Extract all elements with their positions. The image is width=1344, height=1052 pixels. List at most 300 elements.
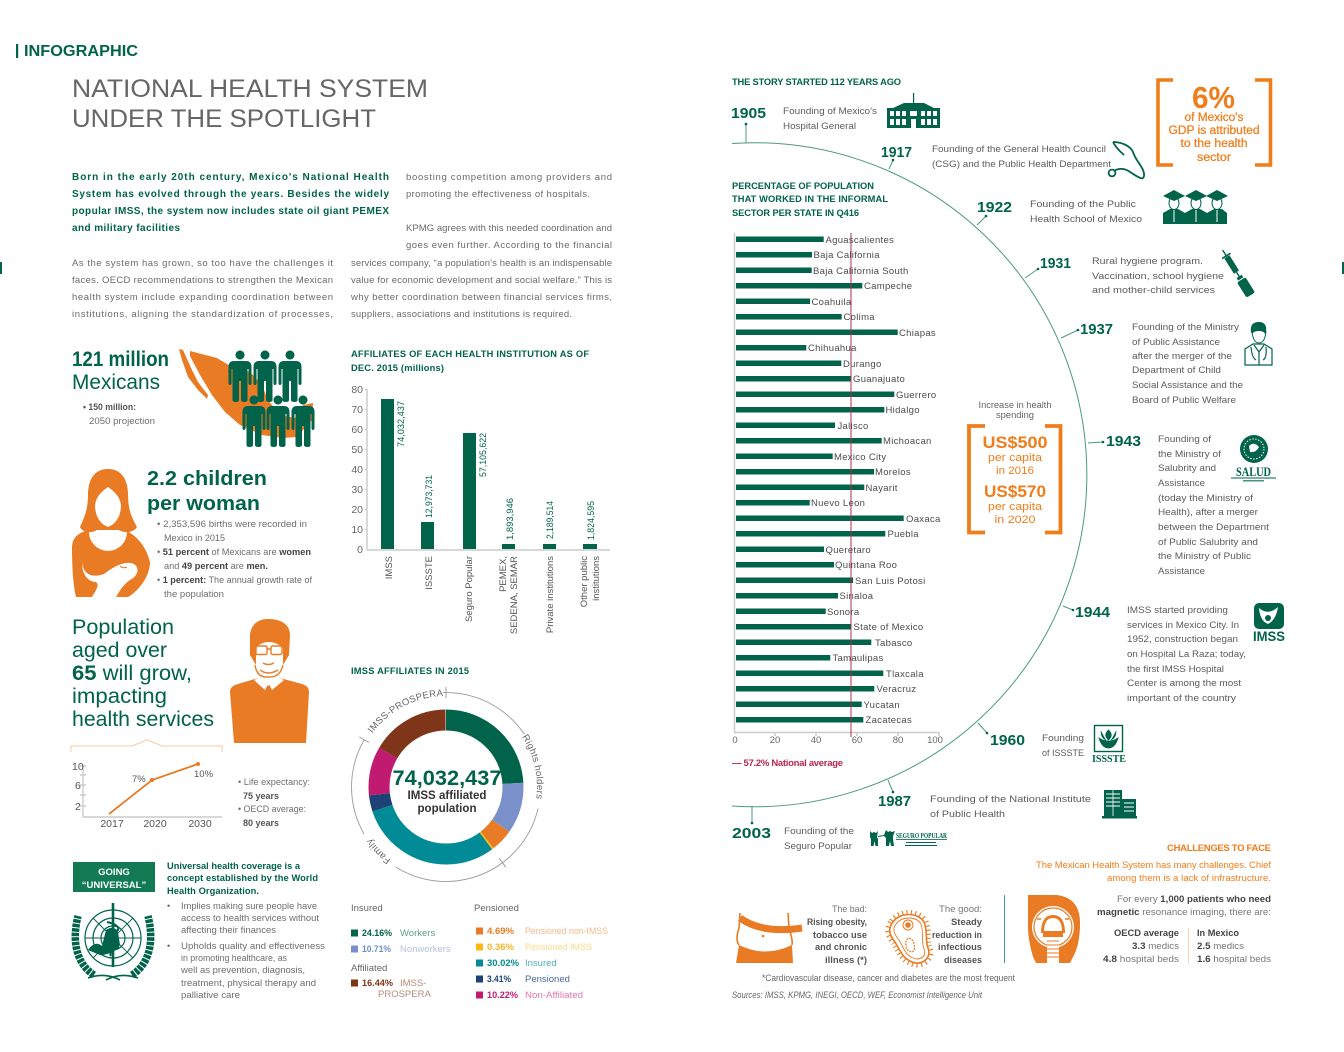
ageing headline	[72, 616, 214, 731]
timeline: 1917: Founding of the General Health Council	[932, 144, 1106, 155]
bar value labels	[396, 401, 597, 540]
population headline: 121 million	[72, 348, 169, 371]
category labels: IMSS	[384, 556, 395, 579]
fertility headline	[147, 468, 267, 515]
category labels: SEDENA, SEMAR	[509, 556, 520, 634]
donut centre text	[392, 767, 502, 815]
OECD comparison: 4.8 hospital beds	[1103, 954, 1179, 965]
icon: stethoscope	[1109, 142, 1144, 178]
timeline: 1931	[1040, 247, 1255, 298]
good news text: diseases	[944, 955, 982, 966]
body text column two: suppliers, associations and institutions is required.	[351, 309, 572, 320]
bad news text: tobacco use	[813, 930, 867, 941]
category labels: PEMEX,	[498, 556, 509, 592]
universal coverage bullets: Upholds quality and effectiveness	[181, 941, 326, 951]
y axis labels: 40	[351, 464, 363, 476]
fertility bullets: • 2,353,596 births were recorded in	[157, 519, 307, 529]
timeline: 1944: 1944	[1075, 604, 1111, 621]
timeline: 1960	[990, 726, 1126, 765]
timeline: 1905	[731, 93, 940, 132]
fertility bullets	[157, 519, 312, 599]
panel: challenges to face	[736, 843, 1271, 983]
timeline: 1943: of Public Salubrity and	[1158, 537, 1258, 548]
legend: Affiliated	[351, 963, 387, 974]
state labels: Tabasco	[875, 638, 912, 649]
donut chart	[379, 720, 513, 854]
bad news text: illness (*)	[825, 955, 867, 966]
badge: GOING	[98, 867, 130, 878]
legend: Pensioned non-IMSS	[525, 926, 608, 937]
timeline: 1943: the Ministry of	[1158, 449, 1221, 460]
body text column two: why better coordination between financial services firms,	[350, 292, 612, 303]
lead paragraph: System has evolved through the years. Besides the widely	[72, 189, 389, 200]
category labels: Private institutions	[545, 556, 556, 633]
title: NATIONAL HEALTH SYSTEM	[72, 75, 428, 103]
timeline: 2003: 2003	[732, 825, 771, 842]
timeline heading: THE STORY STARTED 112 YEARS AGO	[732, 77, 901, 87]
state labels: Michoacan	[883, 436, 932, 447]
category labels	[384, 556, 602, 634]
y axis labels: 10	[351, 524, 363, 536]
state labels: Chiapas	[899, 328, 936, 339]
chart heading	[732, 181, 888, 218]
y axis labels: 50	[351, 444, 363, 456]
MRI statement: For every 1,000 patients who need	[1117, 894, 1271, 905]
bad news text: Rising obesity,	[807, 917, 867, 928]
state labels: Quintana Roo	[835, 560, 897, 571]
legend: Non-Affiliated	[525, 990, 583, 1001]
bar value labels: 74,032,437	[396, 401, 407, 447]
legend: Insured	[525, 958, 557, 969]
state labels: Nuevo Leon	[811, 498, 865, 509]
y axis labels: 20	[351, 504, 363, 516]
timeline: 1944: services in Mexico City. In	[1127, 620, 1239, 631]
timeline: 1944: Center is among the most	[1127, 678, 1241, 689]
chart heading	[351, 349, 589, 373]
body text column two: value for economic development and social welfare.” This is	[351, 275, 612, 286]
state labels: Chihuahua	[808, 343, 857, 354]
x axis labels: 40	[811, 735, 821, 746]
legend: PROSPERA	[378, 989, 431, 1000]
state labels: Tlaxcala	[886, 669, 924, 680]
icon: ISSSTE logo: ISSSTE	[1092, 754, 1126, 765]
callout: 6 percent of GDP	[1158, 80, 1270, 165]
icon: MRI scanner	[1028, 895, 1080, 963]
timeline: 1931: 1931	[1040, 255, 1071, 272]
category labels: institutions	[591, 556, 602, 601]
universal coverage heading	[167, 861, 318, 896]
state labels: Sinaloa	[840, 591, 874, 602]
icon: SALUD logo: SALUD	[1236, 465, 1271, 479]
body text column one: As the system has grown, so too have the challenges it	[72, 258, 333, 269]
sources: Sources: IMSS, KPMG, INEGI, OECD, WEF, Economist Intelligence Unit	[732, 990, 982, 1000]
timeline: 1937: 1937	[1080, 321, 1113, 338]
universal coverage bullets: well as prevention, diagnosis,	[180, 965, 305, 975]
icon: Seguro Popular logo: SEGURO POPULAR	[896, 832, 948, 840]
state labels: Guanajuato	[853, 374, 905, 385]
chart heading: AFFILIATES OF EACH HEALTH INSTITUTION AS OF	[351, 349, 589, 359]
line chart: 2017	[100, 818, 124, 830]
callout: health spending: Increase in health	[978, 400, 1052, 410]
line chart: 2020	[143, 818, 167, 830]
universal coverage bullets: access to health services without	[181, 913, 320, 923]
badge: “UNIVERSAL”	[82, 880, 146, 891]
state labels: Yucatan	[864, 700, 900, 711]
fertility bullets: • 51 percent of Mexicans are women	[157, 547, 311, 557]
good news text: reduction in	[932, 930, 982, 941]
callout: health spending	[969, 400, 1060, 532]
Mexico comparison: 1.6 hospital beds	[1197, 954, 1271, 965]
legend: Nonworkers	[400, 944, 451, 955]
legend: 4.69%	[487, 926, 515, 937]
lead paragraph: popular IMSS, the system now includes state oil giant PEMEX	[72, 206, 389, 217]
bar value labels: 2,189,514	[545, 501, 556, 539]
category labels: Other public	[579, 556, 590, 607]
timeline: 1960: of ISSSTE	[1042, 748, 1084, 759]
good news text: The good:	[939, 904, 982, 915]
lead paragraph: Born in the early 20th century, Mexico's National Health	[72, 172, 389, 183]
timeline: 1943: between the Department	[1158, 522, 1269, 533]
state labels: Colima	[844, 312, 875, 323]
universal coverage bullets: palliative care	[181, 990, 240, 1000]
state labels: Baja California	[814, 250, 880, 261]
good news text	[932, 904, 983, 966]
life expectancy notes: 75 years	[243, 791, 279, 801]
body text column one	[72, 258, 333, 320]
callout: 6 percent of GDP: of Mexico's	[1184, 112, 1244, 124]
callout: 6 percent of GDP: GDP is attributed	[1168, 125, 1260, 137]
state labels: Sonora	[827, 607, 860, 618]
outer ring arcs	[352, 687, 538, 881]
national average line	[850, 233, 852, 737]
state labels: Zacatecas	[866, 715, 912, 726]
timeline: 1922: Health School of Mexico	[1030, 214, 1142, 225]
icon: IMSS logo: IMSS	[1253, 628, 1285, 644]
population projection: • 150 million:	[83, 402, 136, 412]
chart heading: PERCENTAGE OF POPULATION	[732, 181, 874, 191]
line chart: 10	[72, 761, 84, 773]
ageing headline: aged over	[72, 639, 167, 662]
icon: Seguro Popular logo	[870, 830, 948, 846]
Mexico comparison: In Mexico	[1197, 928, 1239, 939]
body text column two	[350, 172, 612, 320]
state labels: Morelos	[875, 467, 911, 478]
bar value labels: 12,973,731	[424, 475, 435, 518]
bad news text: and chronic	[815, 942, 867, 953]
ageing headline: impacting	[72, 685, 167, 708]
state labels: San Luis Potosi	[855, 576, 926, 587]
legend: Pensioned IMSS	[525, 942, 592, 953]
timeline: 1922	[977, 190, 1228, 225]
timeline: 1943: Assistance	[1158, 478, 1205, 489]
population projection	[83, 402, 155, 426]
icon: hospital building	[887, 93, 940, 128]
life expectancy notes: 80 years	[243, 818, 279, 828]
body text column one: institutions, aligning the standardization of processes,	[72, 309, 333, 320]
timeline: 1987: Founding of the National Institute	[930, 794, 1091, 805]
state labels: Coahuila	[812, 297, 852, 308]
panel: IMSS affiliates donut	[351, 666, 608, 1001]
body text column two: promoting the effectiveness of hospitals.	[406, 189, 590, 200]
fertility bullets: • 1 percent: The annual growth rate of	[157, 575, 312, 585]
state labels: Veracruz	[876, 684, 916, 695]
x axis labels: 80	[893, 735, 903, 746]
bad news text	[807, 904, 867, 966]
ring labels: IMSS-PROSPERA	[368, 690, 443, 733]
panel: fertility	[72, 468, 312, 599]
icon: map of Mexico with people	[179, 349, 314, 447]
callout: health spending: US$500	[982, 433, 1048, 452]
timeline arc	[732, 143, 1087, 807]
universal coverage bullets: Implies making sure people have	[181, 901, 317, 911]
donut centre text: IMSS affiliated	[408, 790, 486, 802]
icon: IMSS logo	[1253, 603, 1285, 644]
ring labels	[366, 690, 544, 864]
fertility bullets: the population	[164, 589, 224, 599]
timeline: 1922: 1922	[977, 199, 1012, 216]
timeline stubs	[745, 123, 1104, 824]
badge	[73, 862, 155, 892]
state labels: Jalisco	[838, 421, 869, 432]
state labels: State of Mexico	[854, 622, 923, 633]
timeline: 1905: Hospital General	[783, 121, 856, 132]
timeline: 2003: Seguro Popular	[784, 841, 852, 852]
legend: 16.44%	[362, 978, 394, 989]
timeline: 1943: Founding of	[1158, 434, 1211, 445]
timeline: 1905: 1905	[731, 105, 766, 122]
universal coverage bullets	[167, 901, 326, 1000]
timeline: 1931: and mother-child services	[1092, 285, 1215, 296]
icon: bacterium	[890, 914, 929, 963]
ring labels: Rights holders	[522, 734, 544, 799]
challenges intro	[1036, 860, 1271, 884]
body text column one: faces. OECD recommendations to strengthen the Mexican	[72, 275, 333, 286]
body text column two: boosting competition among providers and	[406, 172, 612, 183]
timeline: 1931: Rural hygiene program.	[1092, 256, 1203, 267]
callout: 6 percent of GDP: sector	[1197, 152, 1231, 164]
timeline: 1943: Salubrity and	[1158, 463, 1216, 474]
timeline: 1944: 1952, construction began	[1127, 634, 1238, 645]
icon: graduates	[1163, 190, 1228, 224]
bracket line	[71, 740, 222, 752]
Mexico comparison	[1197, 928, 1271, 965]
callout: health spending: spending	[996, 410, 1034, 420]
legend: 24.16%	[362, 928, 393, 939]
state labels	[808, 235, 941, 726]
state labels: Baja California South	[813, 266, 909, 277]
timeline: 1944: important of the country	[1127, 693, 1236, 704]
panel: ageing population	[71, 616, 310, 830]
line chart	[72, 761, 222, 830]
y axis labels: 80	[351, 384, 363, 396]
line chart: 2030	[188, 818, 212, 830]
universal coverage heading: Health Organization.	[167, 886, 259, 896]
timeline: 2003	[732, 825, 948, 852]
x axis labels: 0	[732, 735, 738, 746]
life expectancy notes: • Life expectancy:	[238, 777, 310, 787]
line chart: 6	[75, 780, 81, 792]
good news text: Steady	[951, 917, 983, 928]
universal coverage bullets: treatment, physical therapy and	[181, 978, 316, 988]
legend: 0.36%	[487, 942, 515, 953]
callout: 6 percent of GDP: 6%	[1192, 80, 1235, 115]
ageing headline: 65 will grow,	[72, 662, 192, 685]
category labels: Seguro Popular	[464, 556, 475, 622]
timeline: 1917: (CSG) and the Public Health Department	[932, 159, 1111, 170]
panel: population	[72, 348, 314, 447]
universal coverage bullets: in promoting healthcare, as	[181, 953, 287, 963]
timeline: 1944: on Hospital La Raza; today,	[1127, 649, 1246, 660]
section label: infographic: INFOGRAPHIC	[24, 43, 138, 60]
category labels: ISSSTE	[424, 556, 435, 590]
panel: going universal	[73, 861, 326, 1000]
timeline: 1960: 1960	[990, 732, 1025, 749]
OECD comparison	[1103, 928, 1179, 965]
challenges intro: The Mexican Health System has many challenges. Chief	[1036, 860, 1271, 871]
OECD comparison: OECD average	[1114, 928, 1179, 939]
y axis labels: 60	[351, 424, 363, 436]
legend: Pensioned	[525, 974, 570, 985]
y axis labels	[351, 384, 363, 556]
footnote: *Cardiovascular disease, cancer and diabetes are the most frequent	[762, 973, 1015, 983]
bar value labels: 1,824,595	[586, 501, 597, 540]
state labels: Guerrero	[896, 390, 936, 401]
timeline: 1937: of Public Assistance	[1132, 337, 1220, 348]
timeline: 1943: Health), after a merger	[1158, 507, 1258, 518]
body text column two: KPMG agrees with this needed coordination and	[406, 223, 612, 234]
bar value labels: 57,105,622	[478, 433, 489, 477]
timeline: 1943: Assistance	[1158, 566, 1205, 577]
state labels: Tamaulipas	[832, 653, 884, 664]
callout: health spending: US$570	[984, 482, 1046, 501]
legend: 3.41%	[487, 974, 511, 985]
timeline: 1917	[881, 142, 1144, 178]
body text column two: services company, “a population's health is an indispensable	[351, 258, 612, 269]
timeline: 1917: 1917	[881, 144, 912, 161]
icon: elderly man	[230, 619, 309, 743]
callout: health spending: in 2020	[994, 514, 1036, 526]
icon: waistline	[736, 913, 802, 963]
timeline: 1987: of Public Health	[930, 809, 1005, 820]
fertility bullets: and 49 percent are men.	[164, 561, 268, 571]
OECD comparison: 3.3 medics	[1132, 941, 1179, 952]
good news text: infectious	[938, 942, 982, 953]
chart heading: SECTOR PER STATE IN Q416	[732, 208, 859, 218]
timeline: 1987	[878, 790, 1137, 820]
x axis labels: 20	[770, 735, 780, 746]
x axis labels: 60	[852, 735, 862, 746]
state labels: Oaxaca	[906, 514, 941, 525]
icon: institute building	[1102, 790, 1137, 818]
bars	[736, 236, 904, 722]
timeline: 1937: Department of Child	[1132, 365, 1221, 376]
callout: health spending: in 2016	[996, 465, 1034, 477]
universal coverage heading: concept established by the World	[167, 873, 318, 883]
state labels: Puebla	[888, 529, 919, 540]
panel: affiliates bar chart	[351, 349, 610, 634]
y axis labels: 30	[351, 484, 363, 496]
legend: Workers	[400, 928, 435, 939]
timeline: 1937: Social Assistance and the	[1132, 380, 1243, 391]
timeline: 1944	[1075, 603, 1285, 704]
ageing headline: health services	[72, 708, 214, 731]
timeline: 1943: (today the Ministry of	[1158, 493, 1253, 504]
donut centre text: 74,032,437	[392, 767, 502, 790]
state labels: Hidalgo	[886, 405, 920, 416]
life expectancy notes: • OECD average:	[238, 804, 306, 814]
ageing headline: Population	[72, 616, 174, 639]
state labels: Queretaro	[826, 545, 871, 556]
icon: mother with baby	[72, 469, 150, 597]
title	[72, 75, 428, 133]
x axis labels	[732, 735, 943, 746]
callout: 6 percent of GDP: to the health	[1180, 138, 1248, 150]
legend: Insured	[351, 903, 383, 914]
state labels: Nayarit	[866, 483, 898, 494]
icon: WHO emblem	[75, 903, 151, 980]
title: UNDER THE SPOTLIGHT	[72, 105, 376, 133]
state labels: Aguascalientes	[826, 235, 894, 246]
population headline: Mexicans	[72, 371, 160, 394]
legend: Pensioned	[474, 903, 519, 914]
Mexico comparison: 2.5 medics	[1197, 941, 1244, 952]
y axis labels: 0	[357, 544, 363, 556]
ring labels: Family	[366, 840, 390, 864]
timeline: 1937	[1080, 321, 1272, 406]
fertility bullets: Mexico in 2015	[164, 533, 225, 543]
timeline: 1960: Founding	[1042, 733, 1084, 744]
legend: 10.22%	[487, 990, 519, 1001]
icon: SALUD logo	[1231, 435, 1276, 482]
x axis labels: 100	[927, 735, 943, 746]
challenges heading: CHALLENGES TO FACE	[1167, 843, 1271, 854]
state labels: Mexico City	[834, 452, 886, 463]
timeline: 1943: the Ministry of Public	[1158, 551, 1251, 562]
donut centre text: population	[418, 803, 476, 815]
icon: syringe	[1218, 247, 1255, 298]
callout: health spending: per capita	[988, 452, 1043, 464]
universal coverage bullets: •	[167, 941, 170, 951]
timeline: 1931: Vaccination, school hygiene	[1092, 271, 1224, 282]
lead paragraph: and military facilities	[72, 223, 180, 234]
timeline: 1922: Founding of the Public	[1030, 199, 1136, 210]
legend: 10.71%	[362, 944, 391, 955]
universal coverage bullets: affecting their finances	[181, 925, 277, 935]
timeline: 1937: after the merger of the	[1132, 351, 1232, 362]
fertility headline: 2.2 children	[147, 468, 267, 490]
line chart: 2	[75, 801, 81, 813]
y axis labels: 70	[351, 404, 363, 416]
universal coverage bullets: •	[167, 901, 170, 911]
timeline: 1943: 1943	[1106, 433, 1141, 450]
donut heading: IMSS AFFILIATES IN 2015	[351, 666, 469, 676]
timeline: 1987: 1987	[878, 793, 911, 810]
legend: 30.02%	[487, 958, 520, 969]
population projection: 2050 projection	[89, 416, 155, 426]
line chart: 7%	[132, 774, 146, 785]
state labels: Campeche	[864, 281, 912, 292]
bars	[381, 399, 597, 549]
timeline: 1905: Founding of Mexico's	[783, 106, 877, 117]
timeline: 2003: Founding of the	[784, 826, 854, 837]
chart heading: THAT WORKED IN THE INFORMAL	[732, 194, 888, 204]
state labels: Durango	[843, 359, 882, 370]
population headline	[72, 348, 169, 394]
MRI statement	[1097, 894, 1271, 918]
timeline: 1937: Founding of the Ministry	[1132, 322, 1239, 333]
legend: IMSS-	[400, 978, 426, 989]
MRI statement: magnetic resonance imaging, there are:	[1097, 907, 1271, 918]
